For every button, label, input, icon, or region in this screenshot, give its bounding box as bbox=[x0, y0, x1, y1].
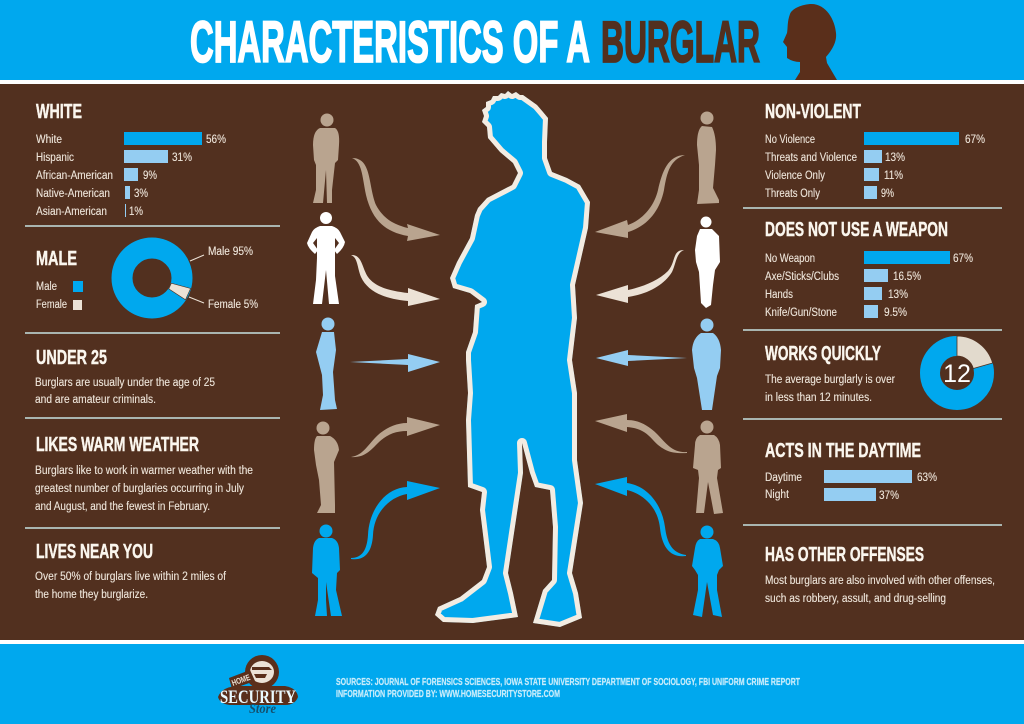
panel: likes warm weather bbox=[35, 433, 253, 513]
panel: non-violent bar chart: 9% bbox=[881, 188, 894, 200]
logo: Home Security Store bbox=[218, 655, 298, 717]
panel: gender donut bbox=[36, 246, 258, 311]
panel: likes warm weather: Burglars like to work in warmer weather with the bbox=[35, 465, 253, 477]
left figure 2: white bbox=[307, 212, 345, 304]
footer band bbox=[0, 640, 1024, 724]
panel: non-violent bar chart: Threats Only bbox=[765, 188, 820, 200]
panel: lives near you bbox=[35, 540, 227, 601]
panel: has other offenses: HAS OTHER OFFENSES bbox=[765, 543, 924, 566]
panel: weapon bar chart: 9.5% bbox=[884, 307, 907, 319]
header band bbox=[0, 0, 1024, 84]
panel: works quickly: WORKS QUICKLY bbox=[765, 342, 881, 365]
right arrow 3 bbox=[596, 350, 687, 366]
panel: non-violent bar chart: NON-VIOLENT bbox=[765, 100, 861, 123]
panel: race bar chart: 31% bbox=[172, 152, 192, 164]
right figure 1: tan bbox=[697, 112, 719, 204]
panel: acts in the daytime: Night bbox=[765, 489, 790, 501]
icon: head silhouette bbox=[783, 4, 837, 80]
panel: race bar chart: Native-American bbox=[36, 188, 110, 200]
panel: works quickly: The average burglarly is over bbox=[765, 374, 895, 386]
panel: likes warm weather: LIKES WARM WEATHER bbox=[36, 433, 199, 456]
panel: gender donut: Female 5% bbox=[208, 299, 258, 311]
panel: weapon bar chart bbox=[765, 218, 973, 319]
panel: non-violent bar chart bbox=[765, 100, 985, 200]
right arrow 4 bbox=[595, 414, 687, 453]
panel: gender donut: MALE bbox=[36, 247, 77, 270]
right figure 3: light blue bbox=[692, 318, 721, 410]
right figure 5: blue bbox=[692, 526, 723, 617]
panel: under 25: UNDER 25 bbox=[36, 346, 107, 369]
panel: acts in the daytime: Daytime bbox=[765, 472, 802, 484]
logo: Home Security Store: HOME bbox=[230, 672, 252, 688]
panel: race bar chart: WHITE bbox=[36, 100, 82, 123]
panel: works quickly bbox=[765, 336, 993, 404]
panel: non-violent bar chart: Threats and Violence bbox=[765, 152, 857, 164]
panel: under 25: and are amateur criminals. bbox=[35, 394, 156, 406]
left arrow 2 bbox=[351, 255, 440, 306]
panel: acts in the daytime: ACTS IN THE DAYTIME bbox=[765, 439, 921, 462]
left arrow 1 bbox=[352, 158, 440, 241]
logo: Home Security Store: Store bbox=[249, 702, 276, 717]
left figure 5: blue bbox=[312, 524, 342, 616]
panel: race bar chart: Hispanic bbox=[36, 152, 74, 164]
title: CHARACTERISTICS OF A bbox=[190, 10, 590, 75]
panel: lives near you: LIVES NEAR YOU bbox=[36, 540, 153, 563]
left figure 1: tan bbox=[313, 114, 339, 203]
panel: weapon bar chart: Hands bbox=[765, 289, 793, 301]
panel: race bar chart bbox=[36, 100, 226, 218]
left arrow 3 bbox=[350, 354, 440, 372]
panel: non-violent bar chart: 13% bbox=[885, 152, 905, 164]
panel: race bar chart: 3% bbox=[134, 188, 148, 200]
panel: race bar chart: 56% bbox=[206, 134, 226, 146]
panel: likes warm weather: and August, and the fewest in February. bbox=[35, 501, 210, 513]
panel: works quickly: 12 bbox=[943, 360, 971, 388]
panel: non-violent bar chart: Violence Only bbox=[765, 170, 825, 182]
panel: has other offenses: such as robbery, assult, and drug-selling bbox=[765, 593, 946, 605]
panel: weapon bar chart: 67% bbox=[953, 253, 973, 265]
sources text bbox=[336, 677, 800, 700]
panel: lives near you: the home they burglarize. bbox=[35, 589, 148, 601]
panel: gender donut: Male bbox=[36, 281, 57, 293]
panel: race bar chart: 9% bbox=[143, 170, 157, 182]
panel: gender donut: Female bbox=[36, 299, 67, 311]
sources text: SOURCES: JOURNAL OF FORENSICS SCIENCES, IOWA STATE UNIVERSITY DEPARTMENT OF SOCIOLOGY, FBI UNIFORM CRIME REPORT bbox=[336, 677, 800, 688]
panel: weapon bar chart: No Weapon bbox=[765, 253, 815, 265]
central burglar silhouette bbox=[435, 91, 590, 627]
panel: race bar chart: 1% bbox=[129, 206, 143, 218]
right figure 4: tan bbox=[693, 420, 723, 514]
panel: weapon bar chart: Knife/Gun/Stone bbox=[765, 307, 837, 319]
panel: likes warm weather: greatest number of burglaries occurring in July bbox=[35, 483, 244, 495]
panel: acts in the daytime bbox=[765, 439, 937, 502]
panel: non-violent bar chart: 11% bbox=[884, 170, 903, 182]
panel: acts in the daytime: 63% bbox=[917, 472, 937, 484]
title: BURGLAR bbox=[601, 10, 760, 75]
panel: race bar chart: Asian-American bbox=[36, 206, 107, 218]
left arrow 4 bbox=[351, 417, 440, 457]
panel: race bar chart: White bbox=[36, 134, 62, 146]
panel: gender donut: Male 95% bbox=[208, 246, 253, 258]
left figure 4: tan bbox=[314, 422, 339, 513]
panel: weapon bar chart: 13% bbox=[888, 289, 908, 301]
panel: has other offenses: Most burglars are also involved with other offenses, bbox=[765, 575, 995, 587]
panel: under 25 bbox=[35, 346, 215, 406]
panel: under 25: Burglars are usually under the age of 25 bbox=[35, 377, 215, 389]
panel: weapon bar chart: 16.5% bbox=[893, 271, 921, 283]
logo: Home Security Store: SECURITY bbox=[220, 687, 296, 708]
right arrow 5 bbox=[595, 477, 686, 556]
right arrow 2 bbox=[596, 250, 684, 303]
panel: race bar chart: African-American bbox=[36, 170, 113, 182]
panel: acts in the daytime: 37% bbox=[879, 490, 899, 502]
right figure 2: white bbox=[695, 216, 720, 308]
sources text: INFORMATION PROVIDED BY: WWW.HOMESECURITYSTORE.COM bbox=[336, 689, 560, 700]
left figure 3: light blue bbox=[316, 318, 337, 410]
left arrow 5 bbox=[351, 481, 440, 559]
panel: lives near you: Over 50% of burglars live within 2 miles of bbox=[35, 571, 227, 583]
panel: has other offenses bbox=[765, 543, 995, 605]
right arrow 1 bbox=[595, 155, 685, 238]
panel: weapon bar chart: Axe/Sticks/Clubs bbox=[765, 271, 839, 283]
panel: non-violent bar chart: No Violence bbox=[765, 134, 815, 146]
panel: non-violent bar chart: 67% bbox=[965, 134, 985, 146]
panel: works quickly: in less than 12 minutes. bbox=[765, 392, 872, 404]
